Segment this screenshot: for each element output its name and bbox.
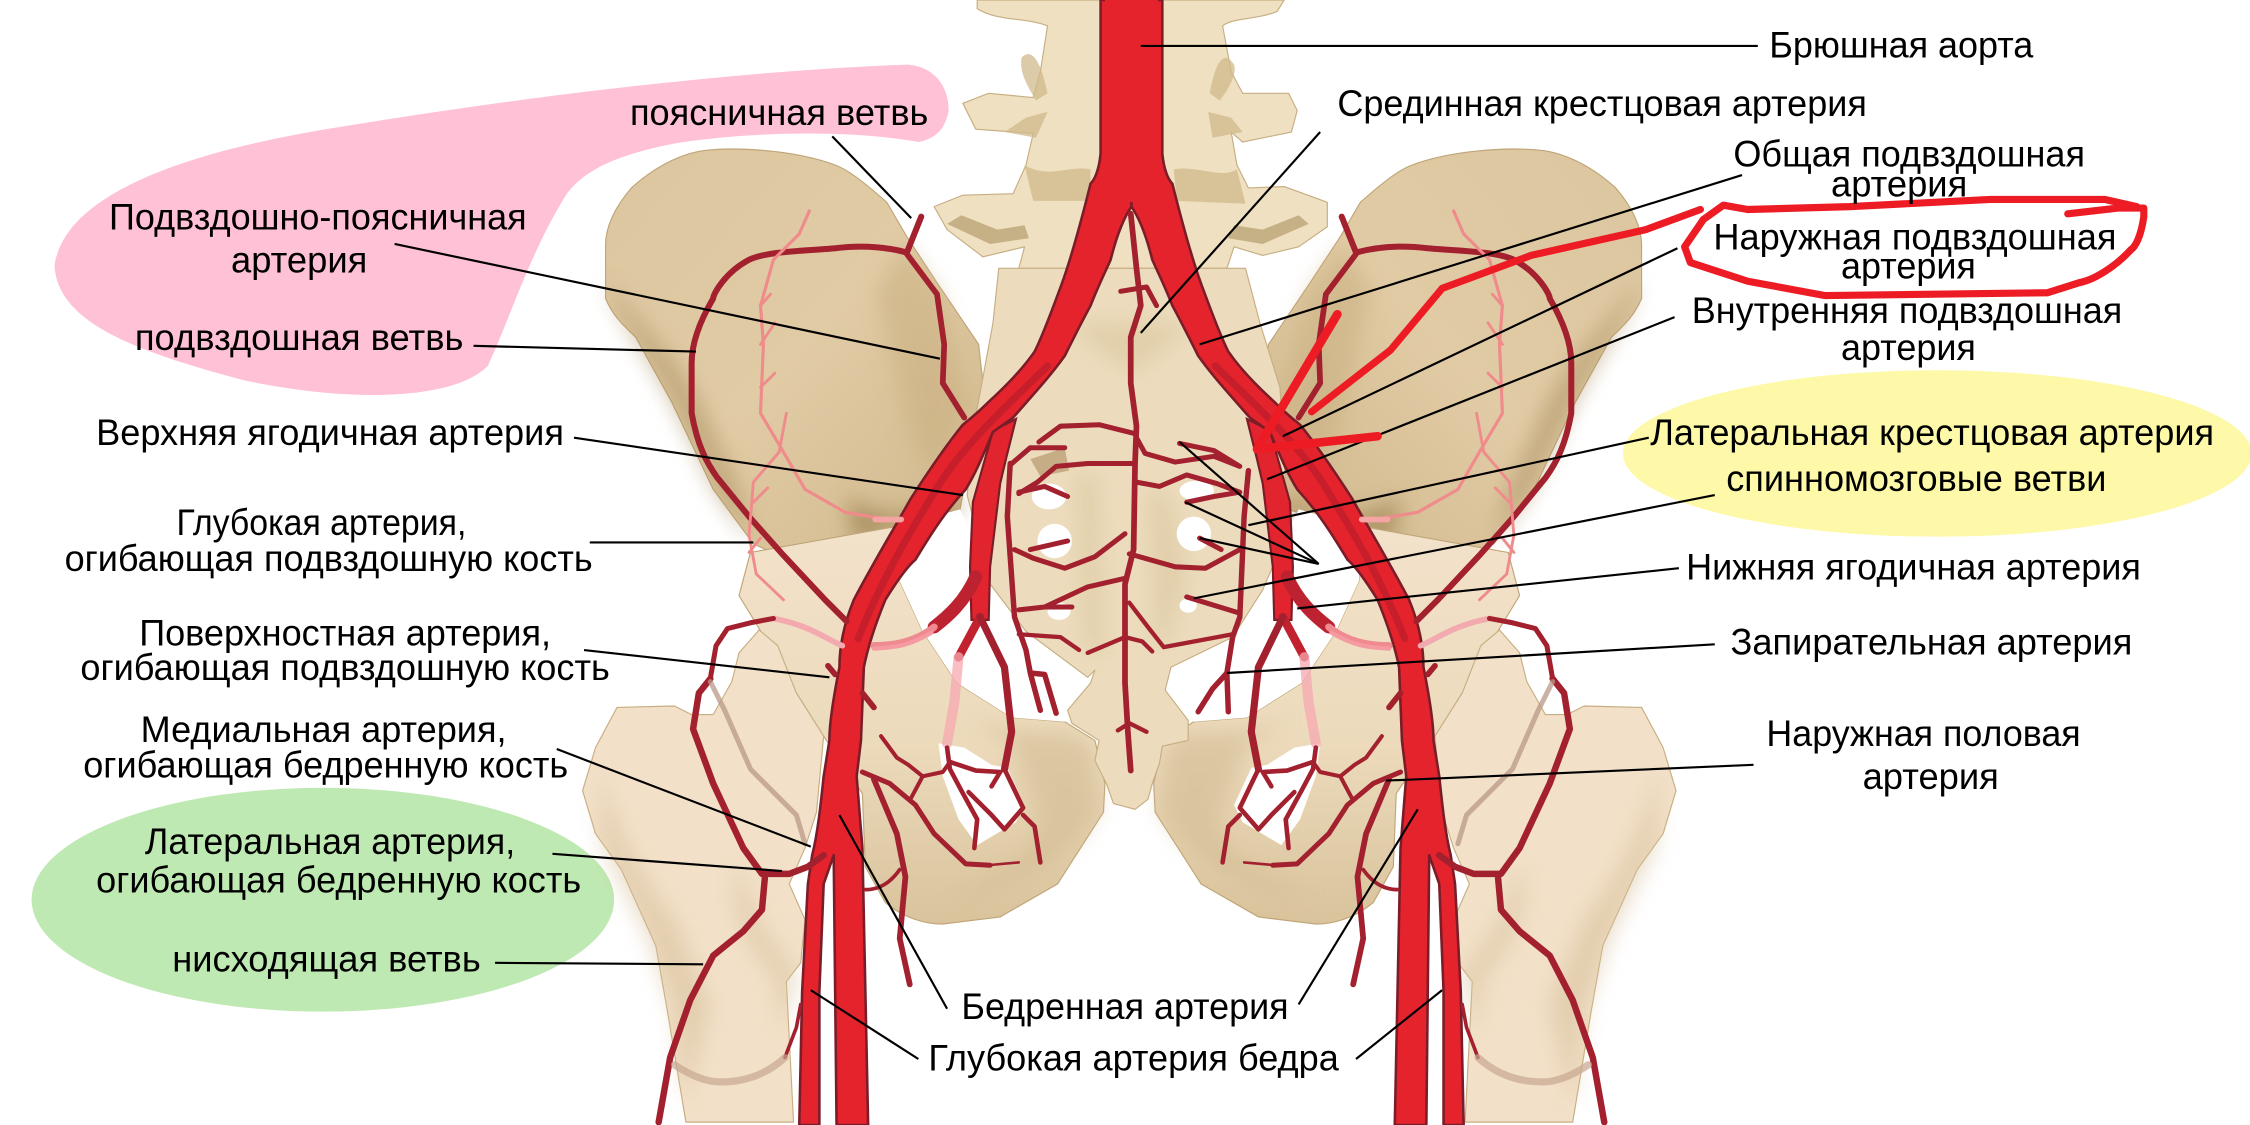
median and lateral sacral arteries <box>1007 214 1248 771</box>
left pubis and ischium <box>739 509 1105 924</box>
label: median sacral artery: Срединная крестцовая артерия <box>1337 82 1867 124</box>
label: iliolumbar artery: Подвздошно-поясничная <box>109 196 527 238</box>
label: lumbar branch: поясничная ветвь <box>630 91 928 133</box>
lumbar spine <box>934 0 1327 268</box>
right iliac wing <box>1264 149 1642 567</box>
label: obturator artery: Запирательная артерия <box>1731 620 2132 662</box>
left iliac wing <box>606 149 983 567</box>
label: iliolumbar artery: артерия <box>231 239 367 281</box>
label: iliolumbar artery <box>109 196 527 281</box>
label: internal iliac artery <box>1692 289 2122 368</box>
label: lateral circumflex femoral artery: Латеральная артерия, <box>145 820 515 862</box>
label: superior gluteal artery: Верхняя ягодичная артерия <box>96 411 564 453</box>
label: medial circumflex femoral artery <box>83 708 568 786</box>
highlight: lateral sacral artery area <box>1623 370 2250 537</box>
label: spinal branches: спинномозговые ветви <box>1726 457 2107 499</box>
label: external iliac artery: Наружная подвздошная <box>1713 216 2117 258</box>
label: superficial circumflex iliac artery: Поверхностная артерия, <box>139 612 551 654</box>
leader lines <box>395 46 1758 1059</box>
red hand-drawn annotation <box>1257 199 2144 449</box>
highlight: lateral femoral circumflex area <box>32 788 614 1012</box>
label: lateral circumflex femoral artery <box>96 820 581 901</box>
label: iliac branch: подвздошная ветвь <box>135 316 463 358</box>
label: inferior gluteal artery: Нижняя ягодичная артерия <box>1686 546 2141 588</box>
label: external iliac artery <box>1713 216 2117 286</box>
highlight: iliolumbar artery area <box>55 65 949 395</box>
label: external pudendal artery: Наружная половая <box>1766 712 2081 754</box>
sacrum and coccyx <box>967 268 1286 809</box>
left femur <box>583 630 824 1122</box>
label: lateral circumflex femoral artery: огибающая бедренную кость <box>96 859 581 901</box>
label: deep circumflex iliac artery: Глубокая артерия, <box>176 501 466 543</box>
label: deep femoral artery: Глубокая артерия бедра <box>928 1036 1339 1078</box>
label: descending branch: нисходящая ветвь <box>172 937 481 979</box>
label: lateral sacral artery: Латеральная крестцовая артерия <box>1650 411 2214 453</box>
label: external iliac artery: артерия <box>1841 244 1976 286</box>
label: internal iliac artery: артерия <box>1841 326 1976 368</box>
label: superficial circumflex iliac artery <box>80 612 610 688</box>
right iliac and femoral arteries <box>1131 0 1604 1125</box>
label: common iliac artery: Общая подвздошная <box>1733 132 2085 174</box>
label: internal iliac artery: Внутренняя подвздошная <box>1692 289 2122 331</box>
right pubis and ischium <box>1154 509 1520 924</box>
label: deep circumflex iliac artery <box>65 501 593 579</box>
label: external pudendal artery <box>1766 712 2081 797</box>
left iliac and femoral arteries <box>659 0 1132 1125</box>
label: medial circumflex femoral artery: Медиальная артерия, <box>141 708 507 750</box>
label: medial circumflex femoral artery: огибающая бедренную кость <box>83 744 568 786</box>
label: femoral artery: Бедренная артерия <box>961 985 1289 1027</box>
label: abdominal aorta: Брюшная аорта <box>1769 23 2034 65</box>
label: external pudendal artery: артерия <box>1863 755 1999 797</box>
label: superficial circumflex iliac artery: огибающая подвздошную кость <box>80 646 610 688</box>
abdominal aorta centre fill <box>1098 0 1165 202</box>
label: deep circumflex iliac artery: огибающая подвздошную кость <box>65 537 593 579</box>
right femur <box>1435 630 1676 1122</box>
label: common iliac artery: артерия <box>1831 163 1967 205</box>
label: common iliac artery <box>1733 132 2085 205</box>
